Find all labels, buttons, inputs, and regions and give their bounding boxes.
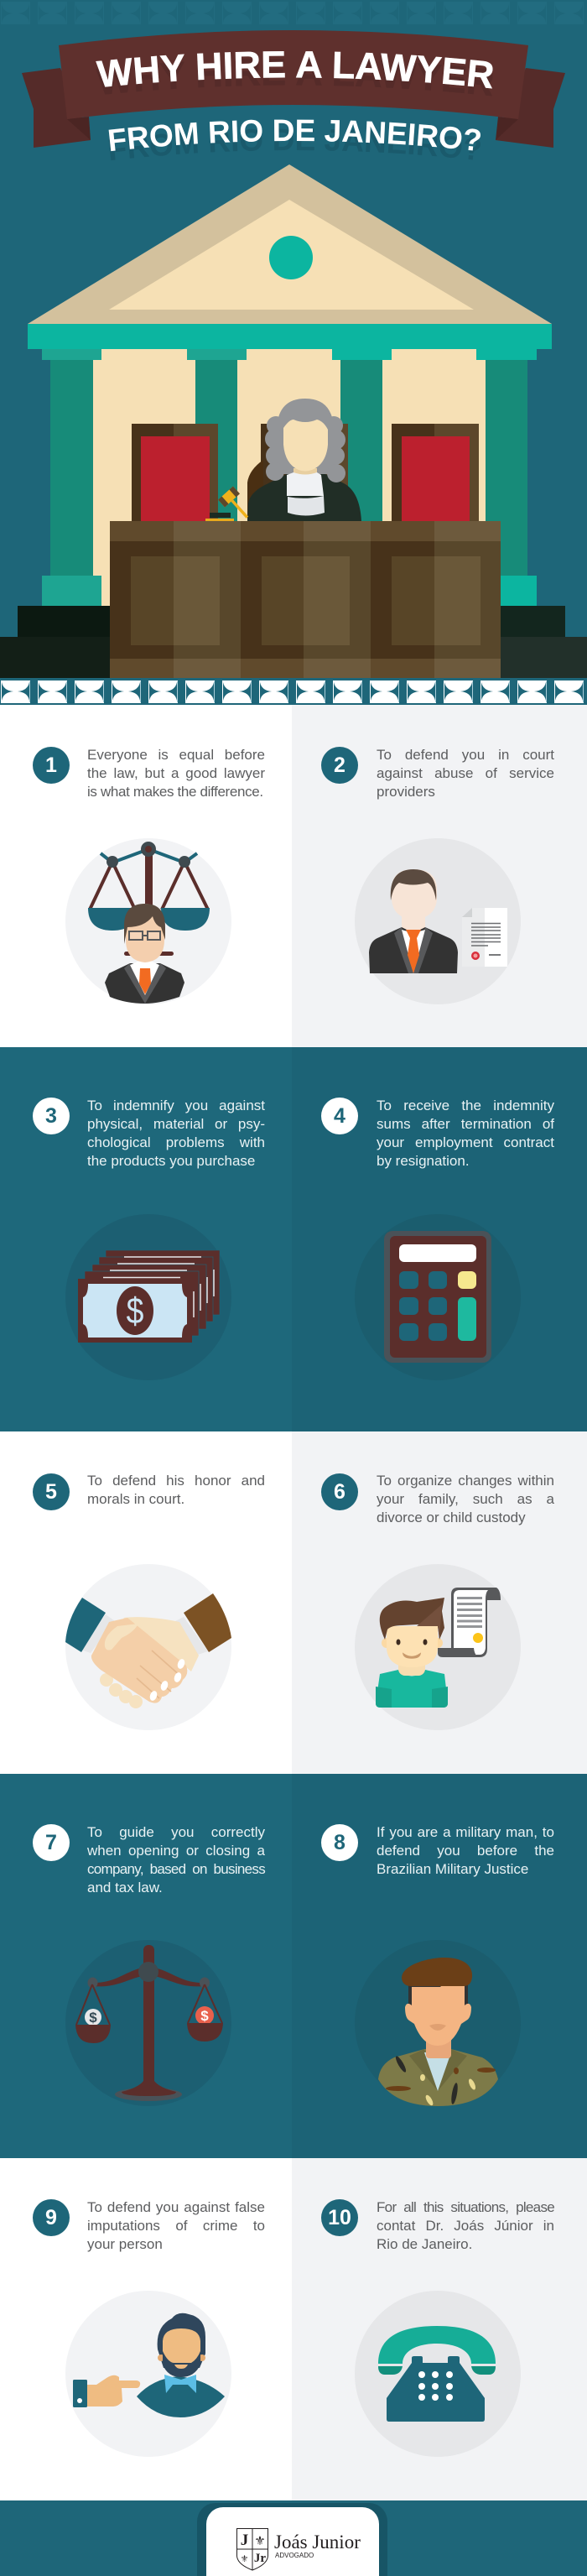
text 9: your person [87,2236,163,2252]
number badge 8: 8 [334,1831,345,1854]
panel 3: indemnify [0,1047,292,1431]
icon: money scale: $ [200,2008,209,2024]
panel 7: opening or closing a company [0,1774,292,2158]
gavel [205,487,255,524]
thrones [132,424,479,521]
number badge 3 [33,1098,70,1134]
judge's bench [110,521,501,678]
text 10 [377,2199,554,2252]
number badge 9: 9 [45,2206,57,2229]
text 4: sums after termination of [377,1116,554,1132]
text 6: To organize changes within [377,1473,554,1489]
text 8: defend you before the [377,1843,554,1859]
number badge 8 [321,1824,358,1861]
icon: calculator [355,1214,521,1380]
icon: lawyer with scales [65,838,231,1004]
number badge 3: 3 [45,1104,57,1128]
footer with logo [0,2500,587,2576]
text 6 [377,1473,554,1525]
text 1: is what makes the difference. [87,784,263,800]
icon: boy with scroll [355,1564,521,1730]
text 2: against abuse of service [377,765,554,781]
text 6: your family, such as a [377,1491,554,1507]
panel 4: employment sums [292,1047,587,1431]
logo subtitle: ADVOGADO [275,2552,314,2559]
number badge 2: 2 [334,754,345,777]
number badge 1: 1 [45,754,57,777]
icon: money scale [65,1940,231,2106]
text 3: chological problems with [87,1134,265,1150]
text 6: divorce or child custody [377,1510,526,1525]
text 5: To defend his honor and [87,1473,265,1489]
icon: soldier [355,1940,521,2106]
judge [247,399,361,521]
text 7: company, based on business [87,1861,265,1877]
text 4: your employment contract [377,1134,554,1150]
text 10: contat Dr. Joás Júnior in [377,2218,554,2234]
text 10: For all this situations, please [377,2199,554,2215]
logo wordmark: Joás Junior [274,2532,361,2553]
panel 2: abuse of service providers [292,705,587,1047]
panel 9: false imputations of crime [0,2158,292,2500]
text 9: To defend you against false [87,2199,265,2215]
text 8: Brazilian Military Justice [377,1861,528,1877]
header: title and courthouse [0,0,587,705]
title line 1: WHY HIRE A LAWYER [96,51,493,96]
icon: man accused by pointing hand [65,2291,231,2457]
ribbon banner [22,30,565,148]
number badge 7: 7 [45,1831,57,1854]
courthouse columns [28,324,552,606]
text 8: If you are a military man, to [377,1824,554,1840]
text 3 [87,1098,265,1169]
text 1: Everyone is equal before [87,747,265,763]
number badge 10: 10 [328,2206,351,2229]
panel 10: contact [292,2158,587,2500]
logo shield [236,2528,268,2570]
icon: banknotes: $ [127,1290,144,1332]
number badge 7 [33,1824,70,1861]
text 7: and tax law. [87,1880,163,1895]
number badge 5 [33,1473,70,1510]
text 1: the law, but a good lawyer [87,765,265,781]
number badge 9 [33,2199,70,2236]
title line 2: FROM RIO DE JANEIRO? [109,119,481,160]
text 2: To defend you in court [377,747,554,763]
text 1 [87,747,265,800]
number badge 4 [321,1098,358,1134]
panel 8: military justice [292,1774,587,2158]
icon: man with document [355,838,521,1004]
panel 6: family changes [292,1431,587,1774]
text 7: To guide you correctly [87,1824,265,1840]
icon: banknotes [65,1214,231,1380]
text 4: To receive the indemnity [377,1098,554,1113]
text 4 [377,1098,554,1169]
number badge 2 [321,747,358,784]
icon: telephone [355,2291,521,2457]
panel 5: honor and morals [0,1431,292,1774]
logo shield: ⚜ [254,2533,266,2548]
logo shield: J [241,2532,248,2549]
number badge 4: 4 [334,1104,345,1128]
logo shield: Jr [254,2552,266,2565]
number badge 6: 6 [334,1480,345,1504]
text 2: providers [377,784,435,800]
text 7: when opening or closing a [87,1843,265,1859]
text 8 [377,1824,554,1877]
icon: money scale: $ [89,2010,97,2026]
text 5 [87,1473,265,1507]
number badge 10 [321,2199,358,2236]
text 7 [87,1824,265,1895]
number badge 6 [321,1473,358,1510]
icon: handshake [65,1564,231,1730]
text 10: Rio de Janeiro. [377,2236,472,2252]
text 9: imputations of crime to [87,2218,265,2234]
logo card [197,2503,387,2576]
text 3: the products you purchase [87,1153,255,1169]
text 5: morals in court. [87,1491,184,1507]
text 3: physical, material or psy- [87,1116,265,1132]
logo shield: ⚜ [241,2553,248,2564]
text 4: by resignation. [377,1153,470,1169]
number badge 5: 5 [45,1480,57,1504]
text 2 [377,747,554,800]
panel 1: equal before the law [0,705,292,1047]
text 9 [87,2199,265,2252]
text 3: To indemnify you against [87,1098,265,1113]
number badge 1 [33,747,70,784]
steps [0,606,587,678]
courthouse pediment [28,164,552,324]
